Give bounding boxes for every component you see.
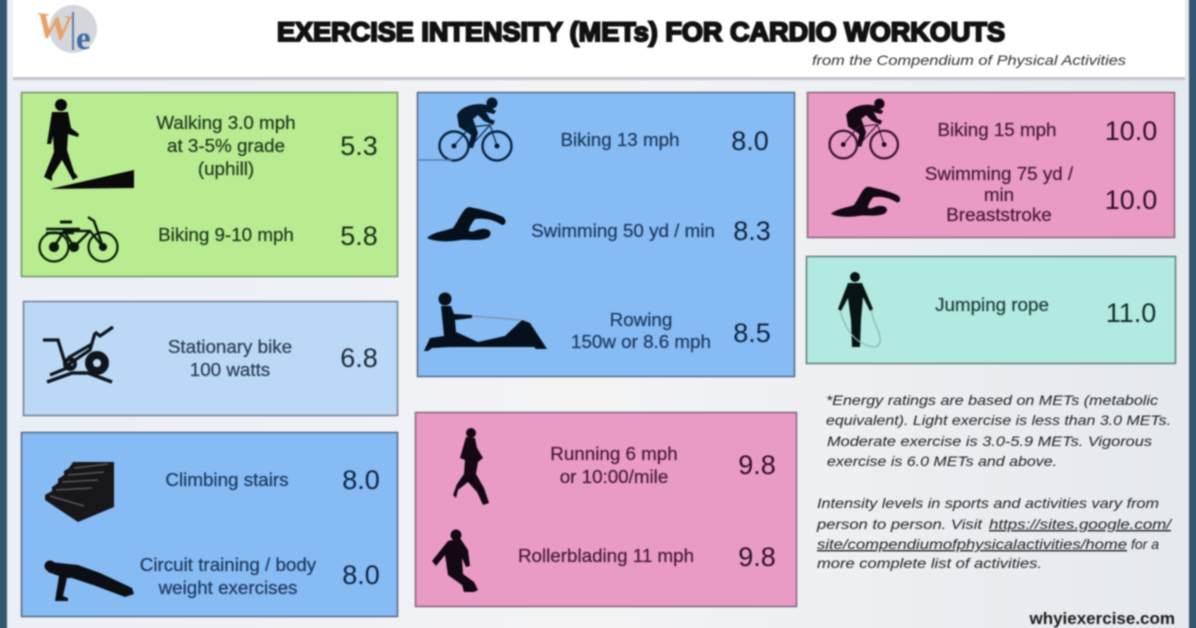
note: intensity levels: https://sites.google.com/ [989, 516, 1174, 532]
label: stationary bike: 100 watts [190, 359, 270, 380]
value: 9.8: 9.8 [738, 542, 776, 572]
value: 8.3: 8.3 [733, 216, 771, 246]
note: energy ratings: *Energy ratings are based on METs (metabolic [826, 392, 1158, 408]
label: running: Running 6 mph [550, 443, 678, 464]
panel: blue stairs and circuit [22, 432, 398, 616]
label: rollerblading: Rollerblading 11 mph [518, 545, 694, 566]
value: 8.0: 8.0 [342, 560, 380, 590]
source credit: whyiexercise.com [1028, 609, 1175, 628]
icon: swimmer [831, 187, 900, 217]
value: 8.0: 8.0 [342, 465, 380, 495]
label: circuit training: weight exercises [158, 577, 297, 598]
value: 10.0: 10.0 [1105, 116, 1157, 146]
panel: teal jumping rope [806, 256, 1176, 364]
icon: stairs [45, 462, 114, 522]
icon: rower [424, 292, 547, 351]
icon: push-up [44, 560, 134, 601]
icon: rollerblader [432, 530, 478, 592]
panel: pink running and rollerblading [416, 412, 796, 606]
logo: e [76, 21, 91, 57]
note: energy ratings: exercise is 6.0 METs and above. [827, 453, 1057, 469]
label: running: or 10:00/mile [560, 466, 668, 487]
icon: runner [453, 428, 489, 505]
icon: racing cyclist [418, 98, 512, 160]
label: jumping rope: Jumping rope [935, 294, 1049, 315]
note: energy ratings: equivalent). Light exercise is less than 3.0 METs. [826, 412, 1171, 428]
value: 11.0: 11.0 [1106, 298, 1156, 328]
label: climbing stairs: Climbing stairs [165, 469, 289, 490]
value: 6.8: 6.8 [340, 343, 378, 373]
right edge band [1189, 0, 1196, 628]
logo [34, 5, 97, 57]
label: biking 9-10: Biking 9-10 mph [158, 224, 294, 245]
value: 10.0: 10.0 [1105, 185, 1157, 215]
note: intensity levels: site/compendiumofphysicalactivities/home [817, 536, 1127, 552]
panel: pink biking and swimming [808, 92, 1174, 238]
label: biking 15: Biking 15 mph [937, 119, 1057, 140]
label: swimming 75: min [984, 184, 1014, 205]
panel: green moderate activities [22, 92, 398, 276]
value: 5.3: 5.3 [340, 131, 378, 161]
note: intensity levels: more complete list of activities. [817, 555, 1042, 571]
label: swimming 50: Swimming 50 yd / min [531, 220, 715, 241]
icon: bicycle [40, 217, 118, 262]
note: intensity levels: for a [1131, 536, 1159, 552]
value: 8.0: 8.0 [731, 126, 769, 156]
value: 5.8: 5.8 [340, 221, 378, 251]
label: walking: Walking 3.0 mph [156, 112, 296, 133]
label: rowing: 150w or 8.6 mph [571, 331, 711, 352]
title: EXERCISE INTENSITY (METs) FOR CARDIO WORKOUTS [277, 17, 1005, 47]
label: stationary bike: Stationary bike [168, 336, 292, 357]
label: swimming 75: Breaststroke [946, 204, 1052, 225]
note: energy ratings: Moderate exercise is 3.0-5.9 METs. Vigorous [827, 433, 1152, 449]
icon: racing cyclist [830, 98, 898, 158]
icon: swimmer [427, 207, 506, 241]
note: intensity levels: Intensity levels in sports and activities vary from [817, 495, 1159, 511]
label: walking: (uphill) [198, 158, 254, 179]
subtitle: from the Compendium of Physical Activities [812, 52, 1126, 68]
value: 9.8: 9.8 [738, 450, 776, 480]
panel: blue biking swimming rowing [418, 92, 794, 376]
label: circuit training: Circuit training / body [140, 554, 317, 575]
panel: stationary bike [24, 302, 398, 416]
logo: W [34, 5, 74, 48]
icon: jumping rope [838, 272, 880, 347]
header band [13, 0, 1185, 80]
icon: walking uphill [44, 99, 134, 189]
icon: stationary bike [43, 327, 113, 382]
left edge band [0, 0, 7, 628]
note: intensity levels: person to person. Visit [816, 516, 983, 532]
label: walking: at 3-5% grade [167, 135, 285, 156]
label: rowing: Rowing [610, 309, 672, 330]
value: 8.5: 8.5 [733, 318, 771, 348]
label: biking 13: Biking 13 mph [560, 129, 680, 150]
label: swimming 75: Swimming 75 yd / [925, 163, 1074, 184]
